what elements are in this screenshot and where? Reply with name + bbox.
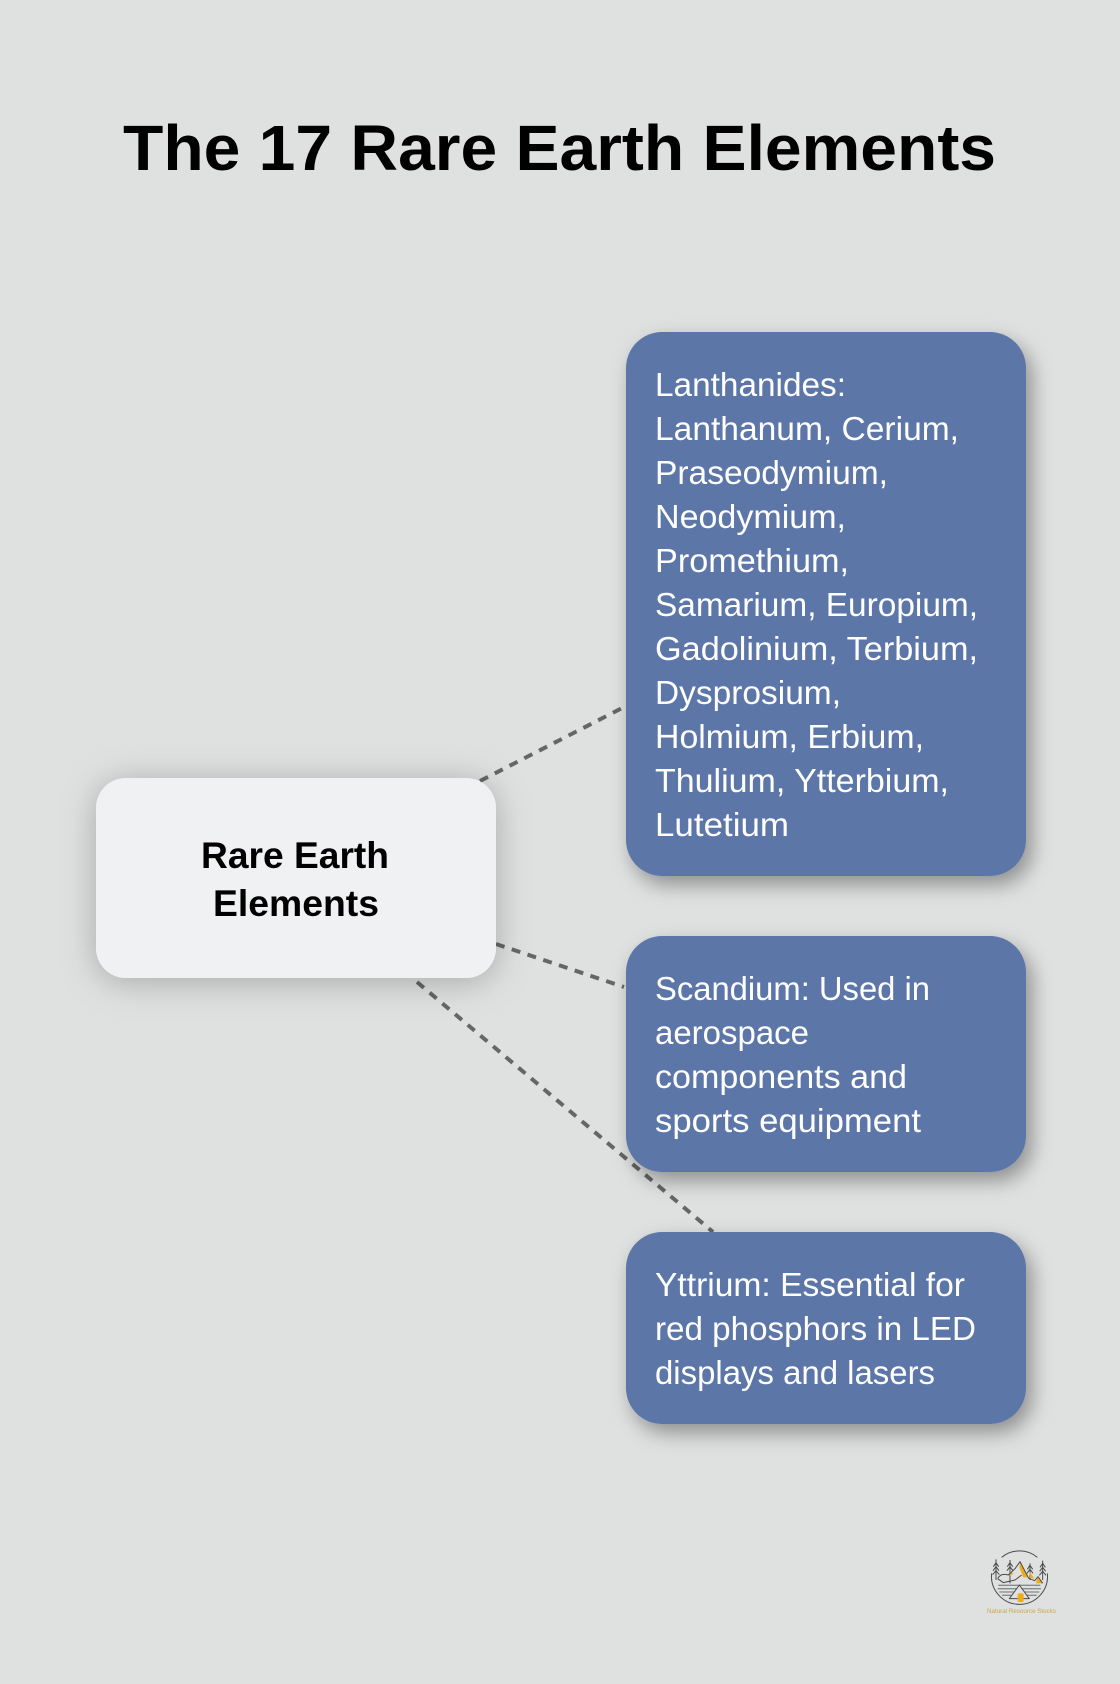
- panel: central node: [96, 778, 496, 978]
- title: The 17 Rare Earth Elements: [123, 112, 996, 184]
- Lanthanides text: Neodymium,: [655, 498, 846, 535]
- panel: Scandium: [626, 936, 1026, 1172]
- Lanthanides text: Lutetium: [655, 806, 789, 843]
- Lanthanides text: Lanthanum, Cerium,: [655, 410, 959, 447]
- Lanthanides text: Promethium,: [655, 542, 849, 579]
- Scandium text: Scandium: Used in: [655, 970, 930, 1007]
- Yttrium text: red phosphors in LED: [655, 1310, 976, 1347]
- Scandium text: aerospace: [655, 1014, 809, 1051]
- connector: Rare Earth Elements to Yttrium: [417, 982, 713, 1232]
- connector: Rare Earth Elements to Scandium: [496, 944, 624, 987]
- icon: Natural Resource Stocks logo: [987, 1551, 1057, 1615]
- Lanthanides text: Dysprosium,: [655, 674, 841, 711]
- panel: Yttrium: [626, 1232, 1026, 1424]
- connector: Rare Earth Elements to Lanthanides: [480, 705, 628, 781]
- Lanthanides text: Praseodymium,: [655, 454, 888, 491]
- Lanthanides text: Gadolinium, Terbium,: [655, 630, 978, 667]
- logo wordmark: Natural Resource Stocks: [987, 1608, 1057, 1615]
- Yttrium text: Yttrium: Essential for: [655, 1266, 965, 1303]
- central node label: Elements: [213, 883, 379, 924]
- Scandium text: components and: [655, 1058, 907, 1095]
- Lanthanides text: Lanthanides:: [655, 366, 846, 403]
- Scandium text: sports equipment: [655, 1102, 921, 1139]
- Lanthanides text: Samarium, Europium,: [655, 586, 978, 623]
- panel: Lanthanides: [626, 332, 1026, 876]
- central node label: Rare Earth: [201, 835, 389, 876]
- Yttrium text: displays and lasers: [655, 1354, 935, 1391]
- Lanthanides text: Thulium, Ytterbium,: [655, 762, 949, 799]
- Lanthanides text: Holmium, Erbium,: [655, 718, 924, 755]
